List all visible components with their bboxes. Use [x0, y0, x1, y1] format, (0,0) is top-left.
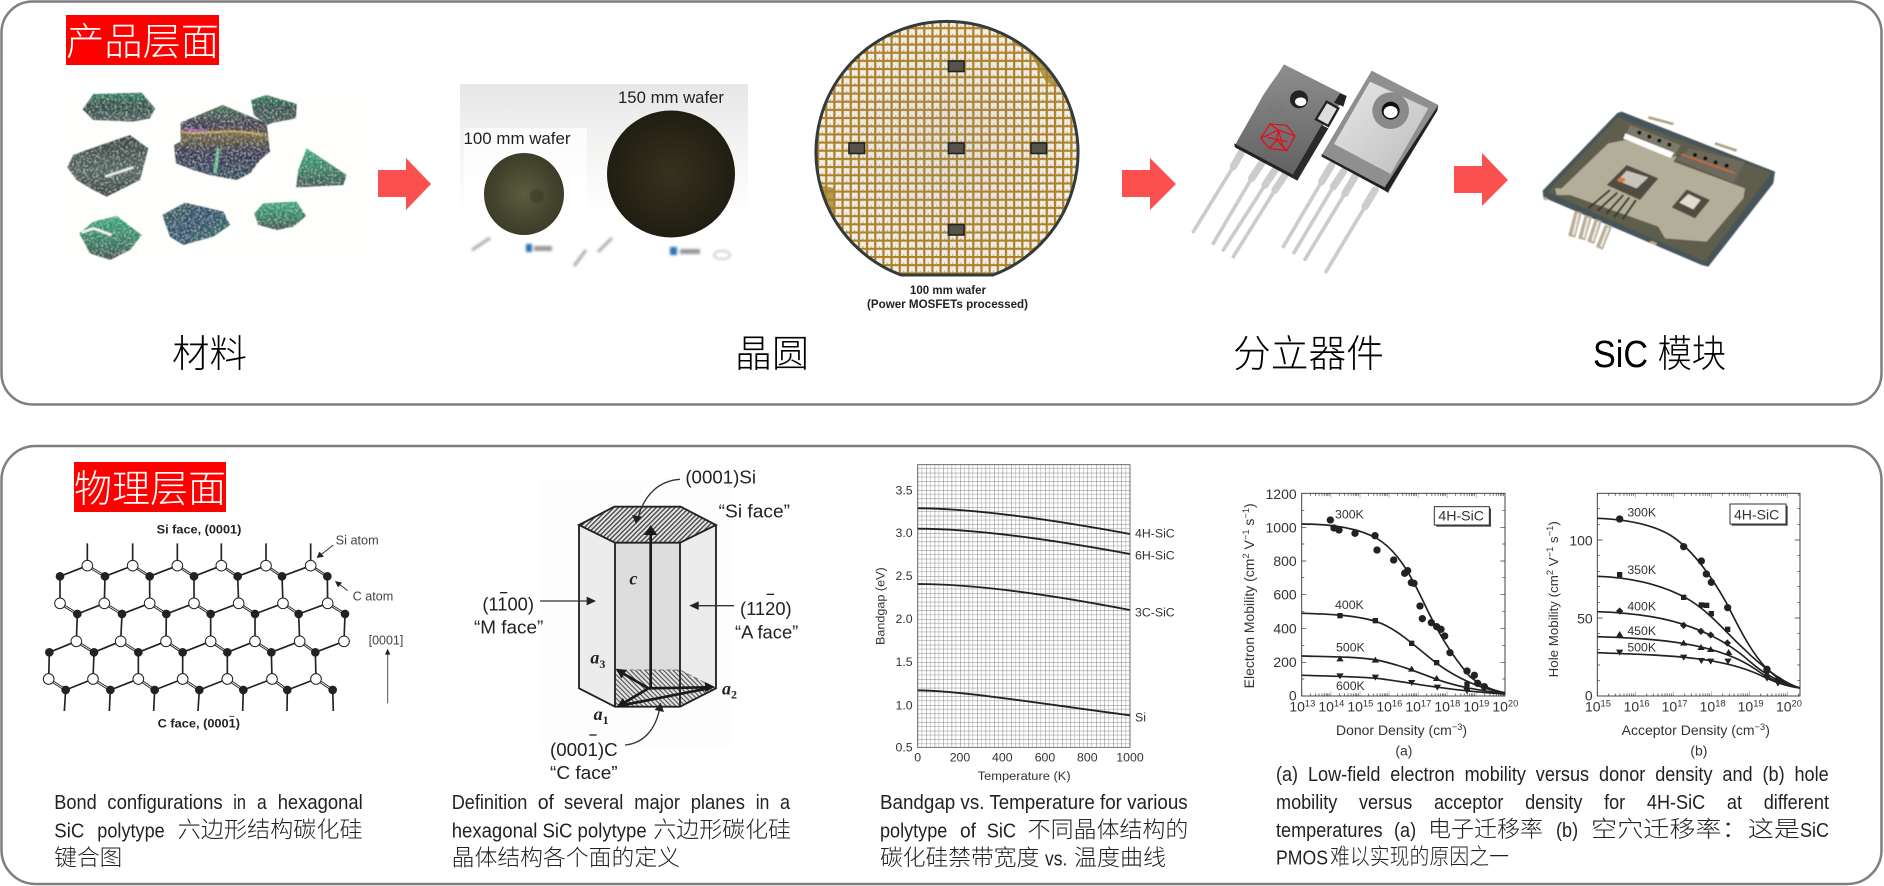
text block: bond configurations caption: polytype [97, 820, 165, 842]
arrow: discrete devices to module [1454, 153, 1508, 206]
x axis ticks: 0 [914, 750, 921, 764]
text block: bandgap caption: 温度曲线 [1074, 846, 1166, 870]
chart: electron mobility [1241, 486, 1518, 759]
text block: mobility caption: donor [1599, 764, 1646, 786]
series labels: 6H-SiC [1135, 548, 1175, 562]
text block: crystal planes caption: Definition [452, 792, 527, 814]
y axis ticks: 3.0 [896, 526, 913, 540]
label: (1-100): (1100) [482, 594, 534, 615]
arrow: wafer to discrete devices [1122, 158, 1176, 210]
pointer: C face [625, 703, 664, 745]
x axis ticks: 10 [1585, 699, 1601, 715]
terminal block: right [1676, 148, 1745, 183]
x axis title: Acceptor Density (cm [1622, 722, 1755, 738]
text block: mobility caption: (b) [1556, 820, 1578, 842]
text block: mobility caption: versus [1536, 764, 1589, 786]
right face [680, 525, 716, 707]
bottom C face [615, 670, 716, 707]
y axis ticks: 50 [1577, 610, 1593, 626]
caption: discrete devices: 分立器件 [1233, 334, 1384, 376]
C atoms [45, 572, 349, 694]
x axis ticks: 10 [1624, 699, 1639, 715]
text block: bond configurations caption: configurations [107, 792, 223, 814]
image: discrete TO-247 devices [1193, 64, 1438, 272]
text block: mobility caption [1276, 764, 1830, 870]
label: C face: “C face” [550, 762, 618, 783]
x axis ticks: 15 [1363, 699, 1373, 709]
text block: bandgap caption: polytype [880, 820, 947, 842]
y axis ticks [1266, 486, 1297, 704]
plot frame and ticks [1597, 493, 1800, 696]
text block: mobility caption: temperatures [1276, 820, 1383, 842]
y axis ticks: 0.5 [896, 741, 913, 755]
text block: mobility caption: mobility [1276, 792, 1337, 814]
chart: hole mobility [1545, 493, 1802, 759]
x axis title: Temperature (K) [978, 769, 1071, 783]
x axis ticks: 10 [1318, 699, 1334, 715]
axis vectors [618, 532, 708, 706]
label: C atom: C atom [353, 589, 393, 603]
text block: mobility caption: (a) [1394, 820, 1416, 842]
y axis ticks: 400 [1273, 620, 1297, 636]
text block: bandgap caption: vs. [1045, 848, 1067, 870]
y axis ticks [896, 483, 913, 755]
text block: mobility caption: hole [1794, 764, 1829, 786]
y axis title: ) [1241, 503, 1257, 508]
text block: mobility caption: density [1655, 764, 1712, 786]
text block: mobility caption: mobility [1465, 764, 1526, 786]
arrow: [0001] direction [385, 649, 390, 703]
text block: mobility caption: for [1604, 792, 1626, 814]
text block: bandgap caption: 不同晶体结构的 [1028, 818, 1188, 842]
pointer: C atom [335, 581, 348, 591]
panel tag (a): (a) [1395, 743, 1412, 759]
image: SiC material crystals [55, 92, 365, 265]
x axis ticks: 19 [1753, 699, 1764, 709]
material box [1434, 507, 1491, 527]
x axis ticks: 18 [1450, 699, 1460, 709]
text block: bond configurations caption: 六边形结构碳化硅 [178, 818, 363, 842]
text block: bond configurations caption: 键合图 [54, 846, 122, 870]
y axis ticks: 800 [1273, 553, 1297, 569]
series labels: 400K [1335, 598, 1365, 612]
text block: crystal planes caption: a [780, 792, 791, 814]
caption: material: 材料 [172, 334, 247, 376]
pointer: M face [540, 597, 596, 605]
wafer disc with die grid [816, 21, 1078, 275]
y axis title: Hole Mobility (cm [1546, 575, 1561, 677]
x axis ticks: 16 [1639, 699, 1650, 709]
text block: mobility caption: SiC [1800, 820, 1829, 842]
chart: bandgap vs temperature [873, 465, 1175, 783]
x axis ticks: 400 [992, 750, 1013, 764]
panel: product level [2, 2, 1882, 404]
text block: crystal planes caption: planes [691, 792, 745, 814]
axis labels: a [722, 678, 731, 698]
y axis title: V [1241, 539, 1257, 553]
x axis title: ) [1765, 722, 1770, 738]
text block: crystal planes caption: 晶体结构各个面的定义 [452, 846, 680, 870]
y axis ticks: 100 [1569, 532, 1593, 548]
plaque details [472, 238, 730, 266]
baseplate [1555, 140, 1745, 242]
y axis title: ) [1546, 521, 1561, 526]
wafer caption: 100 mm wafer [910, 285, 987, 297]
x axis ticks [1289, 699, 1518, 715]
x axis ticks: 10 [1376, 699, 1392, 715]
axis labels: a [590, 647, 599, 667]
text block: mobility caption: density [1525, 792, 1582, 814]
text block: mobility caption: 4H-SiC [1647, 792, 1705, 814]
diagram: hexagonal crystal planes [474, 466, 798, 783]
wafer: 150 mm [607, 110, 735, 238]
series labels: 350K [1627, 563, 1657, 577]
label: (11-20): (1120) [740, 598, 792, 619]
text block: bandgap caption [880, 792, 1188, 870]
image: processed 100 mm wafer [816, 21, 1078, 311]
y axis ticks: 600 [1273, 587, 1297, 603]
panel: physical level [2, 446, 1882, 884]
text block: bond configurations caption [54, 792, 363, 870]
curves [1597, 518, 1800, 688]
text block: bond configurations caption: hexagonal [278, 792, 363, 814]
crystal pieces [67, 93, 347, 260]
chip: large [1607, 165, 1658, 200]
series labels [1335, 507, 1366, 693]
axis labels [590, 568, 737, 727]
x axis ticks: 15 [1601, 699, 1611, 709]
text block: mobility caption: different [1764, 792, 1830, 814]
text block: mobility caption: 空穴迁移率：这是 [1591, 817, 1800, 842]
diagram: hexagonal bond configuration [43, 522, 403, 730]
text block: crystal planes caption: hexagonal SiC polytype [452, 820, 647, 842]
wafer caption [867, 285, 1028, 311]
panel frame [2, 446, 1882, 884]
text block: crystal planes caption [452, 792, 791, 870]
y axis title: −1 [1241, 508, 1251, 519]
axis labels: c [629, 568, 637, 588]
text block: mobility caption: acceptor [1434, 792, 1504, 814]
series labels: 3C-SiC [1135, 606, 1175, 620]
text block: mobility caption: Low-field [1308, 764, 1380, 786]
series labels [1627, 506, 1657, 655]
x axis ticks: 20 [1792, 699, 1802, 709]
text block: bond configurations caption: Bond [54, 792, 97, 814]
wafer caption: (Power MOSFETs processed) [867, 299, 1028, 311]
x axis ticks: 10 [1463, 699, 1479, 715]
label: C face: C face, (0001) [158, 716, 240, 730]
series labels: 500K [1627, 641, 1657, 655]
label: (000-1)C: (0001)C [550, 739, 618, 760]
text block: crystal planes caption: in [756, 792, 769, 814]
pointer: Si atom [317, 545, 333, 558]
image: 100 mm and 150 mm wafers [460, 84, 748, 270]
x axis ticks: 800 [1077, 750, 1098, 764]
y axis ticks: 1.0 [896, 698, 913, 712]
text block: mobility caption: 电子迁移率 [1428, 817, 1543, 842]
text block: bond configurations caption: in [233, 792, 246, 814]
text block: bandgap caption: SiC [987, 820, 1016, 842]
pointer: Si face [632, 479, 680, 524]
x axis ticks: 10 [1700, 699, 1715, 715]
y axis ticks: 2.5 [896, 569, 913, 583]
text block: mobility caption: (b) [1762, 764, 1785, 786]
label: 150 mm wafer: 150 mm wafer [618, 88, 724, 107]
material box: 4H-SiC [1438, 508, 1484, 524]
label: [0001] direction: [0001] [369, 633, 403, 647]
device leads [1193, 152, 1375, 272]
x axis ticks: 600 [1035, 750, 1055, 764]
y axis ticks: 0 [1585, 688, 1593, 704]
prism edges [579, 507, 716, 707]
label: 100 mm wafer: 100 mm wafer [464, 129, 571, 148]
device: front [1234, 64, 1347, 181]
y axis title: V [1546, 557, 1561, 570]
x axis title: Donor Density (cm [1336, 722, 1452, 738]
y axis ticks [1569, 532, 1593, 704]
x axis ticks: 10 [1434, 699, 1450, 715]
curves [918, 508, 1130, 715]
series labels: 600K [1336, 679, 1366, 693]
y axis ticks: 0 [1289, 688, 1297, 704]
caption: SiC module: SiC 模块 [1593, 334, 1726, 376]
pointer: A face [689, 601, 734, 610]
label: (0001)Si: (0001)Si [685, 466, 756, 487]
y axis title: 2 [1241, 553, 1251, 559]
x axis ticks: 10 [1405, 699, 1421, 715]
x axis ticks: 13 [1305, 699, 1315, 709]
x axis ticks [914, 750, 1144, 764]
y axis ticks: 200 [1273, 654, 1297, 670]
x axis ticks: 1000 [1116, 750, 1144, 764]
x axis ticks: 10 [1289, 699, 1305, 715]
series labels: Si [1135, 711, 1146, 725]
series labels: 300K [1335, 507, 1365, 521]
text block: bond configurations caption: SiC [54, 820, 84, 842]
text block: mobility caption: (a) [1276, 764, 1298, 786]
top Si face [579, 507, 716, 543]
label: Si face: “Si face” [719, 501, 790, 522]
x axis title: −3 [1755, 722, 1765, 732]
x axis ticks: 17 [1421, 699, 1431, 709]
plot frame and ticks [1302, 493, 1505, 696]
data points [1616, 515, 1782, 687]
panel tag (b): (b) [1690, 743, 1707, 759]
x axis ticks [1585, 699, 1802, 715]
material box [1730, 504, 1788, 526]
text block: mobility caption: and [1722, 764, 1753, 786]
terminal block: upper [1623, 125, 1681, 158]
axis labels: 1 [603, 713, 609, 727]
series labels: 400K [1627, 600, 1657, 614]
heading: product level: 产品层面 [66, 22, 219, 64]
x axis ticks: 10 [1347, 699, 1363, 715]
text block: mobility caption: 难以实现的原因之一 [1330, 844, 1509, 870]
text block: mobility caption: at [1727, 792, 1742, 814]
text block: bandgap caption: 碳化硅禁带宽度 [880, 846, 1039, 870]
arrow: material to wafer [378, 158, 431, 210]
axis labels: a [594, 704, 603, 724]
x axis ticks: 17 [1677, 699, 1688, 709]
device: back [1322, 71, 1438, 193]
text block: crystal planes caption: several [564, 792, 623, 814]
x axis title: ) [1462, 722, 1467, 738]
text block: mobility caption: versus [1359, 792, 1412, 814]
text block: mobility caption: PMOS [1276, 848, 1328, 870]
label: Si atom: Si atom [336, 534, 379, 548]
single bonds [49, 543, 345, 711]
y axis title: Bandgap (eV) [873, 567, 887, 645]
chip: small [1672, 189, 1710, 218]
x axis ticks: 10 [1776, 699, 1792, 715]
y axis ticks: 2.0 [896, 612, 913, 626]
bond wires and pins [1572, 190, 1636, 248]
y axis title: −1 [1241, 529, 1251, 540]
series labels: 4H-SiC [1135, 526, 1175, 540]
plot grid [918, 465, 1130, 747]
material box: 4H-SiC [1734, 506, 1779, 522]
y axis title: s [1241, 519, 1257, 529]
label: Si face: Si face, (0001) [157, 522, 241, 536]
front face [615, 543, 680, 707]
y axis title: −1 [1545, 547, 1555, 557]
module frame [1543, 112, 1775, 267]
y axis title: s [1546, 536, 1561, 547]
panel frame [2, 2, 1882, 404]
text block: bandgap caption: Bandgap vs. Temperature for various [880, 792, 1188, 814]
wafer: 100 mm [484, 153, 564, 235]
text block: crystal planes caption: of [538, 792, 554, 814]
x axis ticks: 19 [1479, 699, 1489, 709]
x axis ticks: 10 [1492, 699, 1508, 715]
axis labels: 3 [599, 657, 605, 671]
y axis ticks: 1000 [1266, 519, 1297, 535]
series labels: 450K [1627, 624, 1657, 638]
x axis ticks: 20 [1508, 699, 1518, 709]
x axis ticks: 16 [1392, 699, 1402, 709]
text block: crystal planes caption: major [634, 792, 680, 814]
logo: red hexagon [1261, 124, 1295, 151]
x axis ticks: 200 [950, 750, 970, 764]
y axis title: Electron Mobility (cm [1241, 559, 1257, 688]
text block: bandgap caption: of [960, 820, 976, 842]
y axis ticks: 1200 [1266, 486, 1297, 502]
y axis ticks: 3.5 [896, 483, 913, 497]
x axis ticks: 18 [1715, 699, 1726, 709]
series labels: 500K [1336, 641, 1366, 655]
y axis title: −1 [1545, 526, 1555, 536]
x axis ticks: 10 [1662, 699, 1677, 715]
text block: crystal planes caption: 六边形碳化硅 [653, 818, 791, 842]
curves [1302, 524, 1505, 694]
y axis ticks: 1.5 [896, 655, 913, 669]
y axis title: 2 [1545, 570, 1555, 575]
x axis title: −3 [1452, 722, 1462, 732]
image: SiC power module [1543, 112, 1775, 267]
x axis ticks: 14 [1334, 699, 1344, 709]
Si atoms [43, 560, 349, 684]
caption: wafer: 晶圆 [735, 334, 809, 376]
heading: physical level: 物理层面 [74, 469, 226, 511]
data points [1327, 516, 1488, 694]
axis labels: 2 [731, 687, 737, 701]
left face [579, 525, 615, 707]
text block: mobility caption: electron [1390, 764, 1455, 786]
double bonds [49, 566, 345, 690]
label: M face: “M face” [474, 616, 543, 637]
series labels: 300K [1627, 506, 1657, 520]
series labels [1135, 526, 1175, 725]
label: A face: “A face” [735, 621, 798, 642]
x axis ticks: 10 [1738, 699, 1753, 715]
text block: bond configurations caption: a [257, 792, 267, 814]
alignment marks [849, 61, 1046, 235]
